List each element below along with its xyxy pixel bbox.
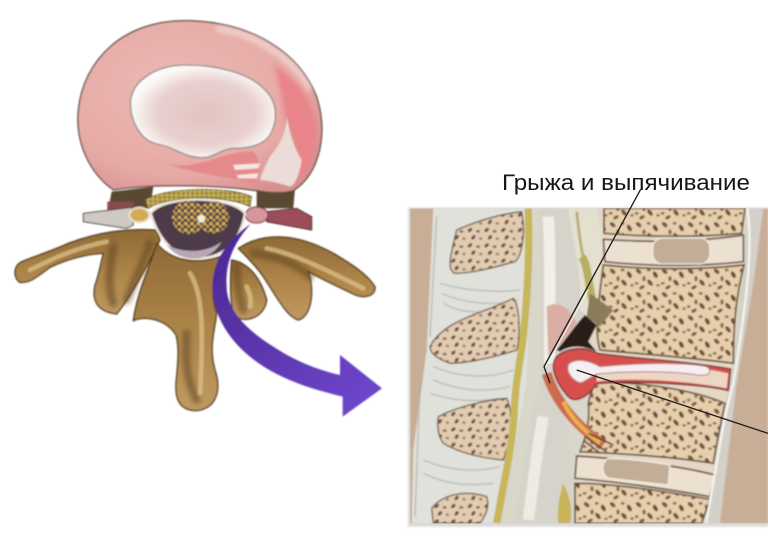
- cauda equina clusters: [172, 201, 205, 234]
- lower disc nucleus: [603, 458, 670, 485]
- vertebral body 1: [604, 208, 745, 236]
- spinous process 3: [438, 398, 511, 460]
- right articular process: [231, 260, 267, 319]
- disc annulus tears: [132, 28, 317, 187]
- lamina and spinous process: [133, 243, 220, 411]
- spinous process 1: [450, 212, 523, 273]
- vertebral column fill: [573, 208, 747, 523]
- purple arrow: [212, 224, 382, 417]
- bone shadows: [109, 243, 310, 400]
- pointer line: disc nucleus: [577, 370, 768, 433]
- spinous process 2: [430, 298, 519, 363]
- dark tissue under disc: [108, 187, 295, 208]
- label: hernia and bulge: Грыжа и выпячивание: [502, 170, 750, 195]
- right nerve root tube: [267, 208, 312, 230]
- bone highlights: [30, 242, 363, 393]
- herniated disc: [553, 349, 731, 399]
- pointer line: hernia: [544, 189, 641, 383]
- spinous process 4: [432, 493, 488, 523]
- spinal canal: [151, 200, 245, 258]
- intervertebral disc: [78, 21, 322, 193]
- nucleus pulposus: [131, 65, 275, 158]
- thecal sac: [515, 208, 587, 523]
- left transverse process: [15, 230, 160, 314]
- vertebral body 3: [580, 383, 725, 463]
- panel shadow: [408, 207, 768, 527]
- hernia nucleus: [568, 360, 710, 383]
- upper disc nucleus: [653, 238, 710, 264]
- vertebra bone: processes: [15, 230, 375, 411]
- upper nerve root: [578, 254, 596, 302]
- central canal fill: [500, 208, 600, 524]
- illustration: vertebra cross-section: [15, 21, 382, 417]
- lower disc: [575, 456, 715, 497]
- panel background: [410, 208, 768, 523]
- ligament band: [412, 208, 540, 523]
- nerve fibres: [583, 433, 613, 453]
- dark wedge over hernia: [557, 315, 597, 352]
- vertebral body 2: [597, 265, 744, 363]
- upper disc: [603, 235, 743, 265]
- vertebral body 4: [575, 483, 710, 523]
- right white border: [706, 208, 750, 523]
- posterior longitudinal strip: [569, 208, 603, 314]
- grey outer strip: [703, 208, 763, 523]
- illustration: spine sagittal panel: [408, 189, 768, 527]
- ligament streaks: [415, 217, 520, 517]
- lower cord tip: [558, 483, 571, 523]
- left foraminal tube: [107, 202, 133, 212]
- ligament stipple: [145, 189, 252, 208]
- compressed nerve root: [547, 373, 603, 445]
- white shadow line beside pointer: [546, 290, 588, 367]
- yellow epidural strip: [497, 208, 529, 523]
- right transverse process: [238, 237, 375, 320]
